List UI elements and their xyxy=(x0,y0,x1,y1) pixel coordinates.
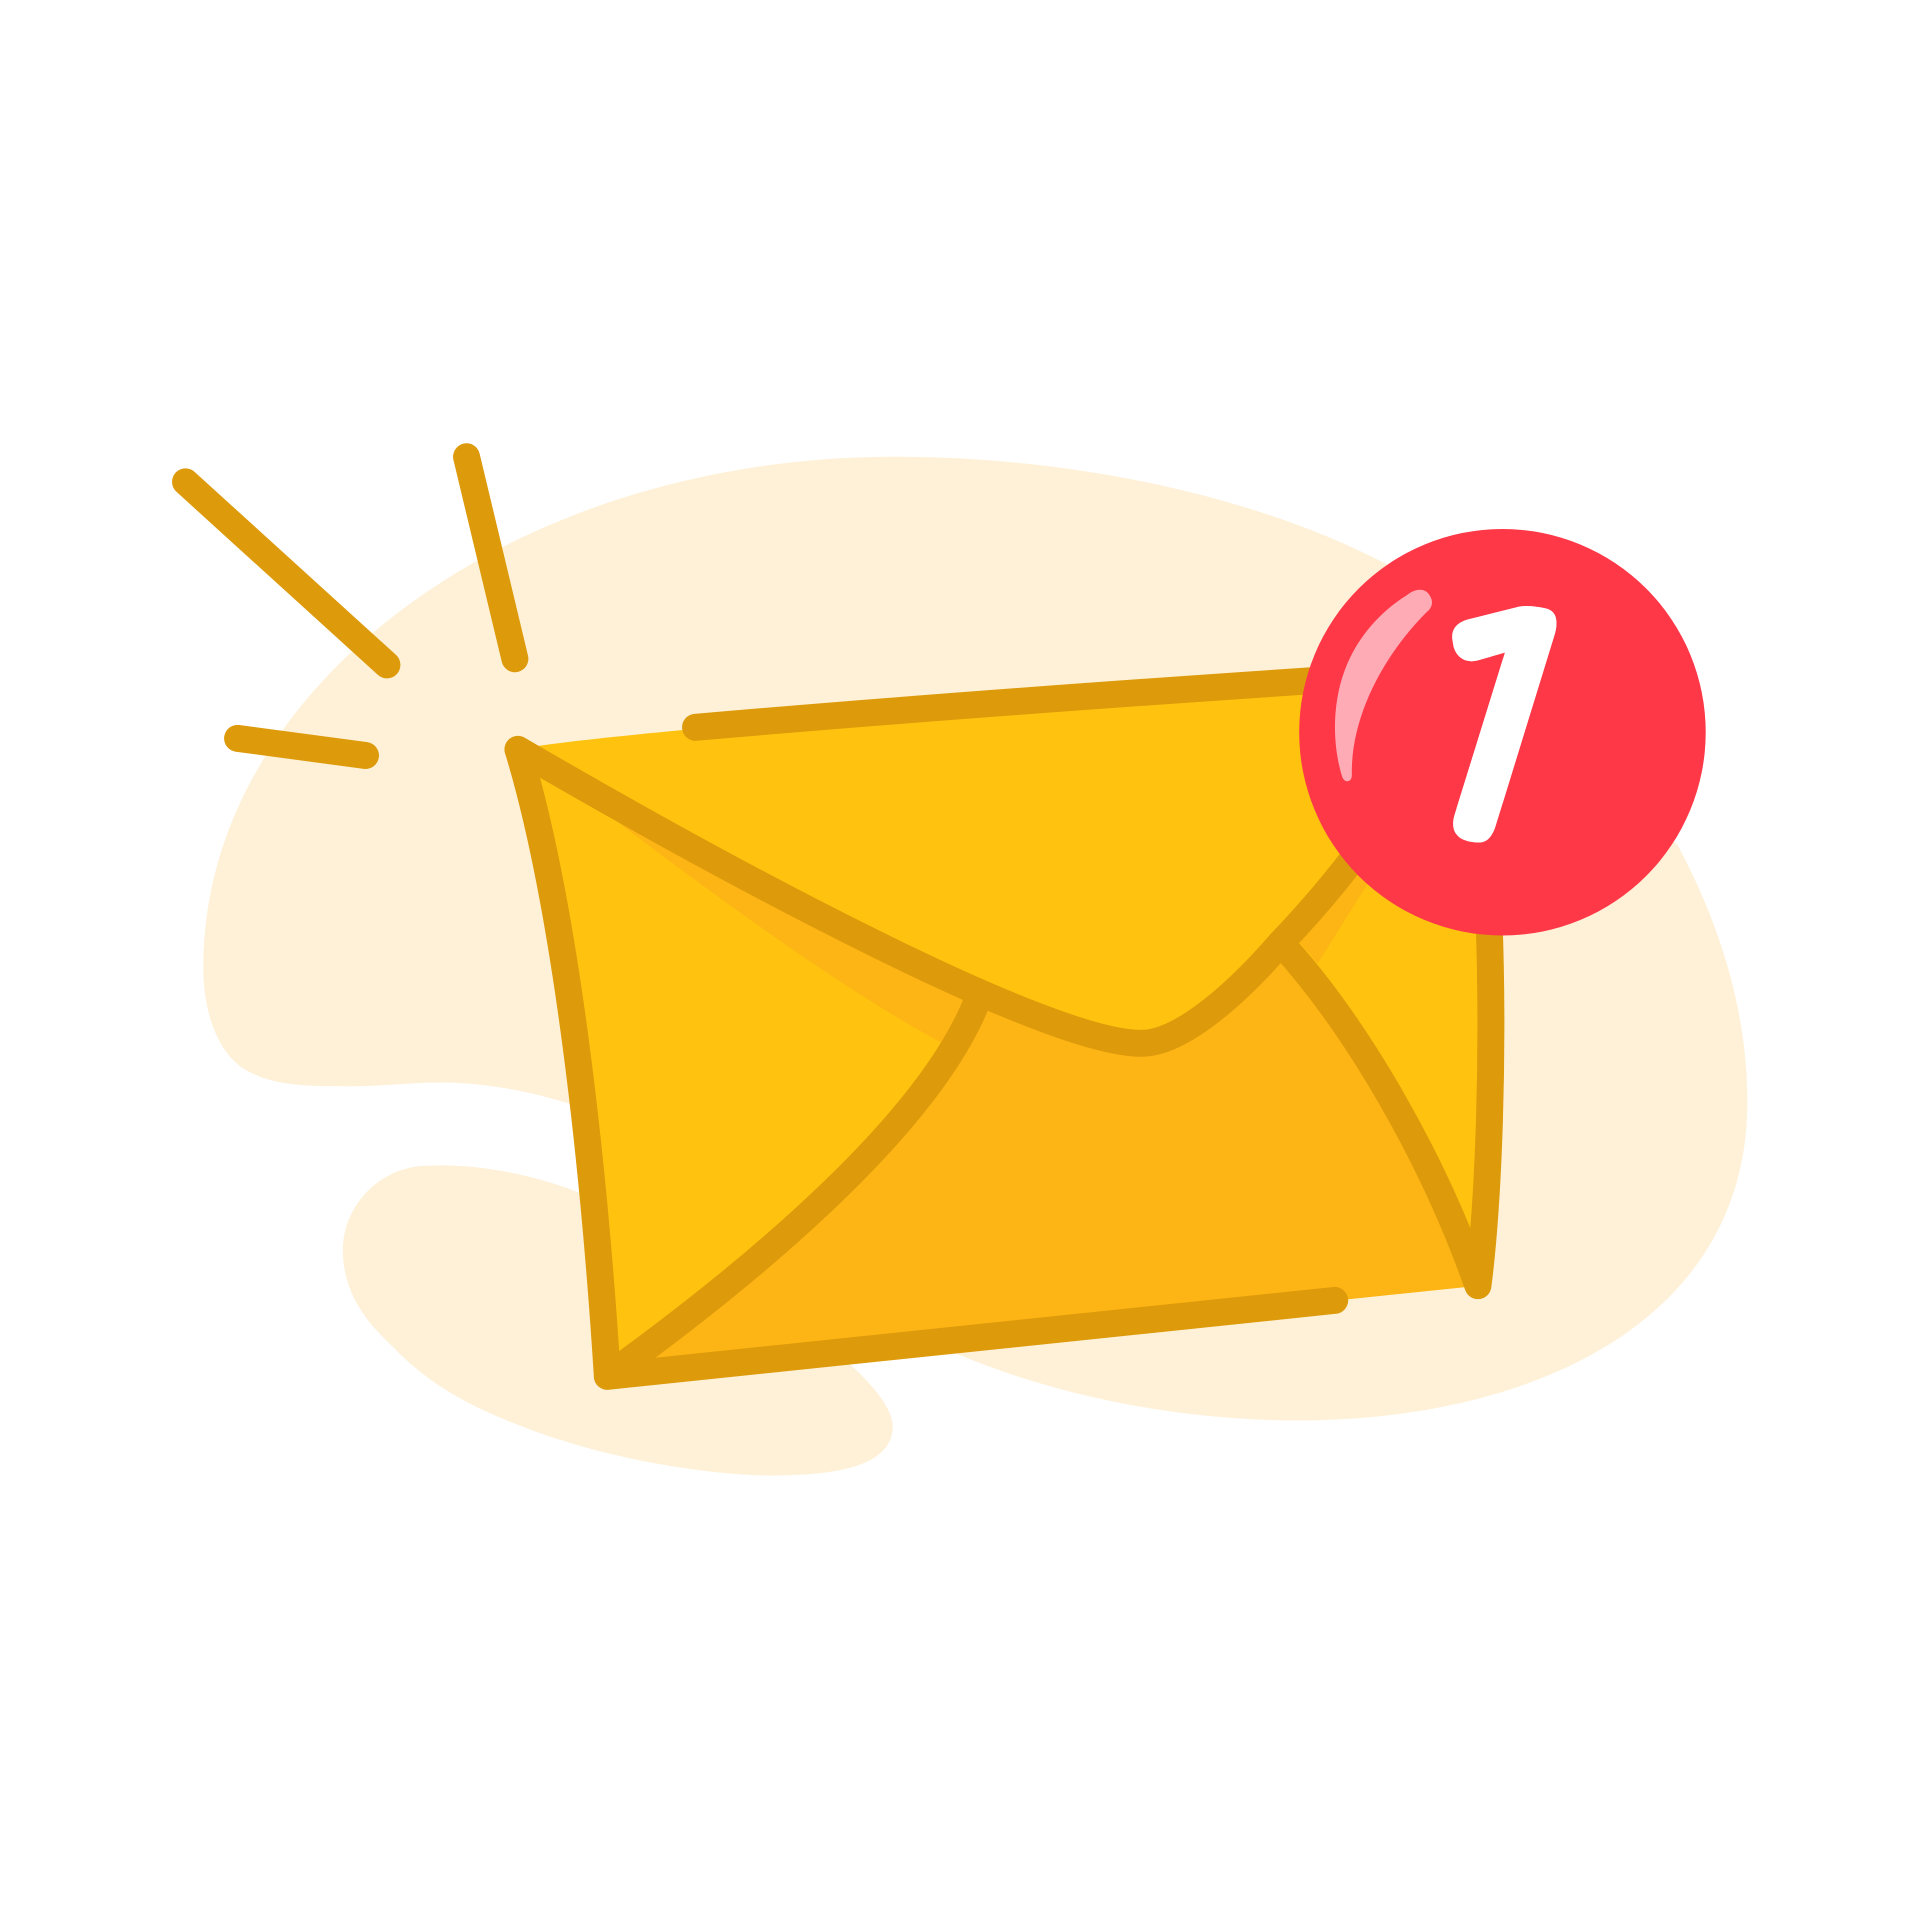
envelope outlines xyxy=(518,680,1491,1376)
flap shadow left xyxy=(576,790,976,1043)
notification badge xyxy=(1299,529,1706,936)
illustration: envelope with notification xyxy=(172,443,1748,1476)
background blob: small xyxy=(343,1165,893,1476)
badge circle xyxy=(1299,529,1706,936)
envelope lower fold xyxy=(607,943,1478,1376)
badge number: 1 xyxy=(1332,465,1680,943)
background blob: large xyxy=(203,457,1747,1420)
icon: sparkle lines xyxy=(186,457,515,756)
icon: envelope xyxy=(518,680,1491,1376)
envelope body xyxy=(518,681,1491,1376)
badge highlight xyxy=(1335,590,1432,781)
flap shadow right xyxy=(1298,863,1369,964)
